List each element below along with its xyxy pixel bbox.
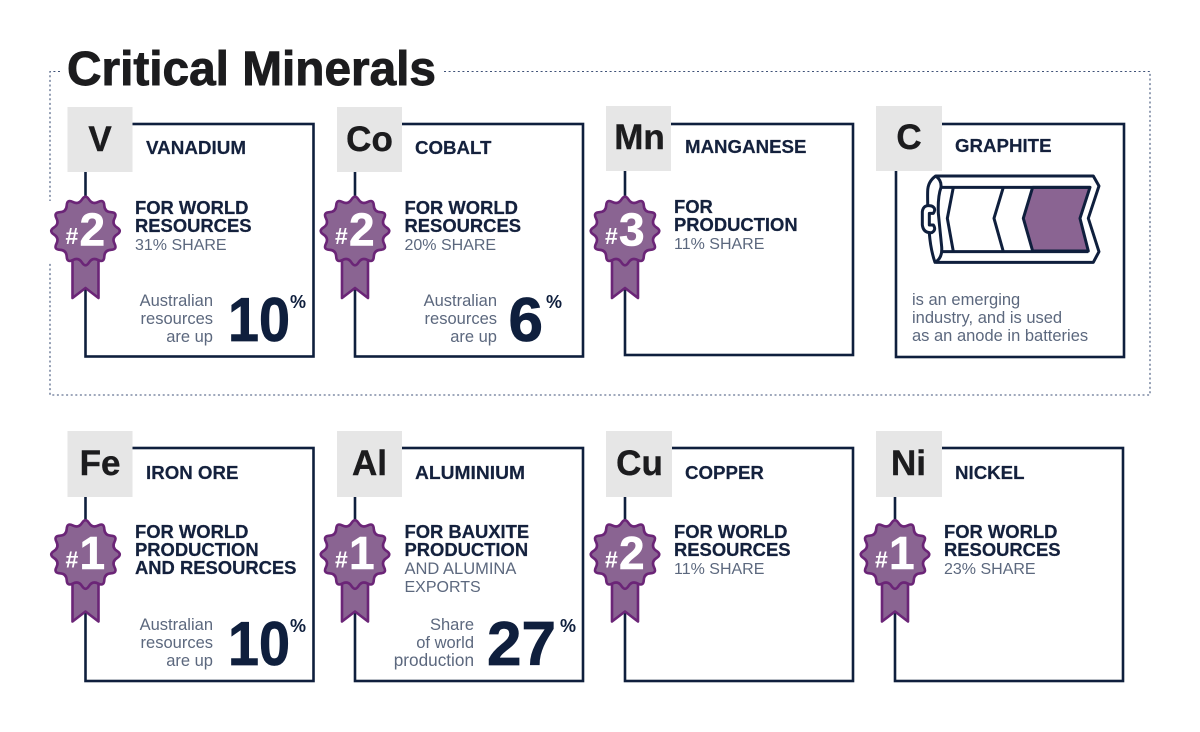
rank description: FOR WORLD	[944, 521, 1057, 542]
stat: share of world production 27%	[394, 610, 576, 679]
element tile: V	[68, 107, 132, 172]
stat: australian resources up 10%: %	[290, 616, 306, 636]
description: industry, and is used	[912, 309, 1062, 327]
panel: graphite	[876, 106, 1124, 357]
stat: australian resources up 10%: 10	[228, 610, 290, 679]
element tile: Cu: Cu	[616, 444, 663, 483]
rank badge: #1: #	[875, 546, 888, 572]
rank badge: #2: #	[66, 223, 78, 249]
panel: copper	[591, 431, 853, 681]
rank description: FOR WORLD	[135, 197, 248, 218]
rank description: RESOURCES	[944, 539, 1060, 560]
rank badge: #1: 1	[349, 527, 375, 579]
panel: aluminium	[321, 431, 583, 681]
rank description	[135, 521, 296, 578]
rank badge: #1	[861, 520, 929, 622]
stat: share of world production 27%: of world	[416, 634, 474, 652]
rank description: RESOURCES	[404, 215, 521, 236]
rank badge: #1: 1	[889, 527, 915, 579]
stat: share of world production 27%: Share	[430, 616, 474, 634]
description: is an emerging	[912, 291, 1020, 309]
element tile: Fe	[68, 431, 132, 497]
stat: share of world production 27%: 27	[487, 610, 556, 679]
stat: australian resources up 10%	[140, 610, 306, 679]
stat: australian resources up 10%: are up	[166, 328, 213, 346]
rank badge: #3	[591, 197, 659, 298]
rank description: FOR WORLD	[135, 521, 248, 542]
stat: australian resources up 10%: Australian	[140, 616, 213, 634]
element tile: Al: Al	[352, 444, 387, 483]
rank description: 31% SHARE	[135, 237, 227, 254]
element tile: Cu	[606, 431, 672, 497]
rank description	[674, 196, 798, 253]
rank description: EXPORTS	[404, 579, 481, 596]
description: as an anode in batteries	[912, 327, 1088, 345]
rank description: FOR	[674, 196, 713, 217]
rank description: PRODUCTION	[674, 214, 798, 235]
panel: nickel	[861, 431, 1123, 681]
panel: iron ore	[51, 431, 313, 681]
icon: battery	[922, 176, 1099, 262]
name: aluminium: ALUMINIUM	[415, 462, 525, 483]
rank badge: #2	[591, 520, 659, 622]
name: iron ore: IRON ORE	[146, 462, 238, 483]
element tile: Fe: Fe	[80, 444, 120, 483]
rank description: AND ALUMINA	[404, 560, 516, 578]
stat: share of world production 27%: %	[560, 616, 576, 636]
stat: share of world production 27%: production	[394, 650, 474, 670]
stat: australian resources up 10%: resources	[141, 310, 213, 328]
stat: australian resources up 6%	[424, 286, 562, 355]
element tile: Ni	[876, 431, 942, 497]
rank badge: #2: #	[605, 546, 618, 572]
element tile: V: V	[88, 120, 112, 159]
rank description: 23% SHARE	[944, 561, 1036, 578]
title: Critical Minerals	[67, 43, 436, 96]
rank badge: #3: #	[605, 223, 618, 249]
name: cobalt: COBALT	[415, 137, 492, 158]
name: vanadium: VANADIUM	[146, 137, 246, 158]
stat: australian resources up 6%: Australian	[424, 292, 497, 310]
element tile: Al	[337, 431, 402, 497]
rank description: FOR BAUXITE	[404, 521, 529, 542]
rank badge: #2	[321, 197, 389, 298]
element tile: Ni: Ni	[891, 444, 926, 483]
rank description: PRODUCTION	[404, 539, 528, 560]
rank badge: #2: 2	[80, 204, 105, 256]
rank badge: #2: 2	[619, 527, 645, 579]
stat: australian resources up 10%: are up	[166, 652, 213, 670]
rank description: FOR WORLD	[404, 197, 518, 218]
rank badge: #1	[321, 520, 389, 622]
stat: australian resources up 10%: 10	[228, 286, 290, 355]
stat: australian resources up 6%: resources	[425, 310, 497, 328]
dashed panel: critical minerals group	[50, 72, 1150, 395]
rank badge: #3: 3	[619, 204, 645, 256]
rank description: FOR WORLD	[674, 521, 787, 542]
rank badge: #1: 1	[80, 527, 105, 579]
rank badge: #1: #	[335, 546, 348, 572]
stat: australian resources up 6%: are up	[450, 328, 497, 346]
rank badge: #2: #	[335, 223, 348, 249]
rank description: PRODUCTION	[135, 539, 259, 560]
element tile: Mn: Mn	[614, 118, 665, 157]
name: nickel: NICKEL	[955, 462, 1025, 483]
rank description: 11% SHARE	[674, 561, 764, 578]
stat: australian resources up 6%: %	[546, 292, 562, 312]
name: manganese: MANGANESE	[685, 136, 806, 157]
element tile: Mn	[606, 106, 671, 171]
rank badge: #2	[51, 197, 120, 298]
rank description	[944, 521, 1060, 578]
element tile: Co: Co	[346, 120, 393, 159]
name: graphite: GRAPHITE	[955, 135, 1052, 156]
rank description: 11% SHARE	[674, 236, 764, 253]
rank badge: #1	[51, 520, 120, 622]
name: copper: COPPER	[685, 462, 764, 483]
stat: australian resources up 10%: %	[290, 292, 306, 312]
stat: australian resources up 10%: Australian	[140, 292, 213, 310]
stat: australian resources up 10%	[140, 286, 306, 355]
rank description	[674, 521, 790, 578]
rank badge: #1: #	[66, 546, 78, 572]
description	[912, 291, 1088, 345]
rank badge: #2: 2	[349, 204, 375, 256]
stat: australian resources up 10%: resources	[141, 634, 213, 652]
element tile: Co	[337, 107, 402, 172]
panel: vanadium	[46, 107, 314, 356]
rank description	[135, 197, 252, 254]
rank description	[404, 521, 529, 596]
rank description: RESOURCES	[674, 539, 790, 560]
element tile: C: C	[896, 118, 922, 157]
rank description	[404, 197, 521, 254]
rank description: RESOURCES	[135, 215, 252, 236]
rank description: AND RESOURCES	[135, 557, 296, 578]
rank description: 20% SHARE	[404, 237, 496, 254]
element tile: C	[876, 106, 942, 171]
panel: cobalt	[321, 107, 583, 356]
stat: australian resources up 6%: 6	[508, 286, 543, 355]
panel: manganese	[591, 106, 853, 355]
